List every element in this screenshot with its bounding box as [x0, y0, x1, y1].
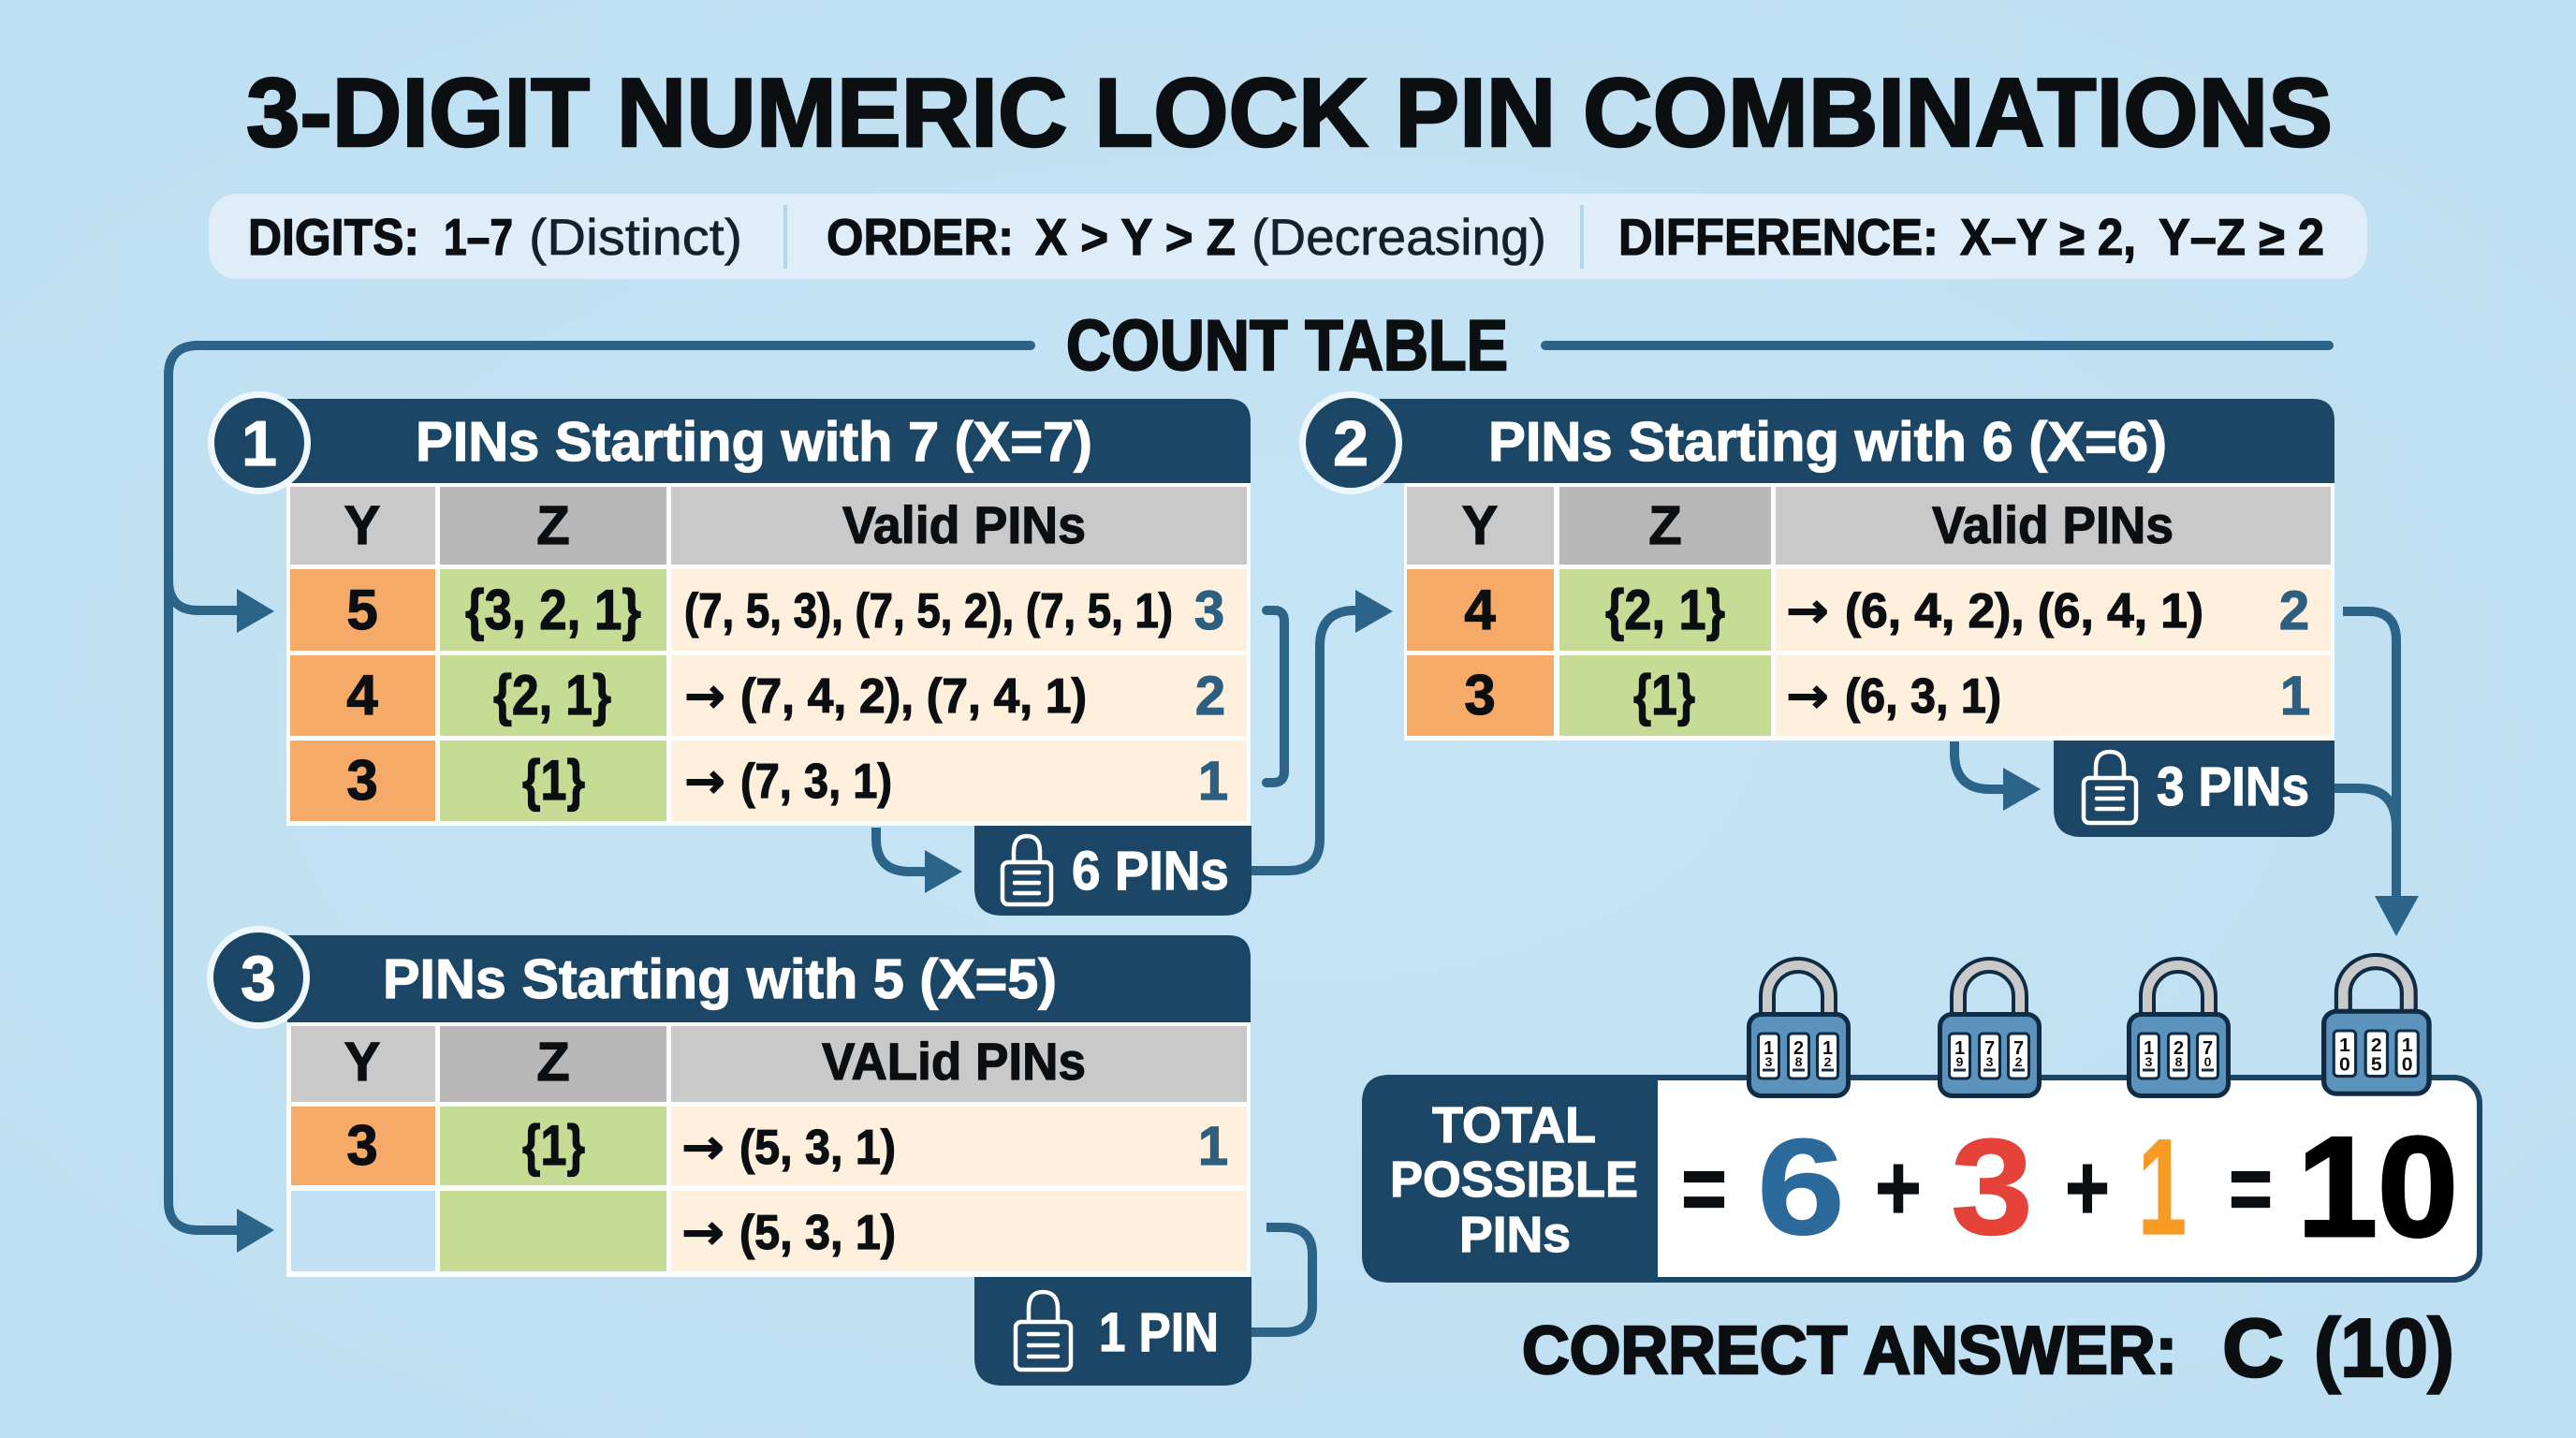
panel 2 number badge: 2 [1333, 408, 1368, 479]
header row: Z [536, 495, 570, 556]
panel 2 title: PINs Starting with 6 (X=6) [1488, 411, 2167, 473]
row Y=4: {2, 1} [493, 664, 611, 726]
icon: combination lock 2: 7 [2013, 1038, 2024, 1059]
row Y=3: {1} [522, 1114, 585, 1177]
icon: combination lock 1: 1 [1822, 1038, 1833, 1059]
icon: combination lock 4: 1 [2339, 1035, 2350, 1056]
total label block [1362, 1075, 1658, 1283]
icon: combination lock 4: 2 [2371, 1035, 2382, 1056]
panel 2 header [1380, 399, 2334, 483]
panel 2 table [1404, 483, 2334, 741]
icon: combination lock 3: 2 [2174, 1038, 2184, 1059]
row Y=4 [1407, 569, 2331, 651]
row Y=3: → [684, 754, 725, 810]
header row: Y [344, 495, 380, 556]
panel 1 number badge: 1 [242, 408, 277, 479]
row Y=4: → [1786, 583, 1829, 639]
correct answer line: CORRECT ANSWER: [1522, 1313, 2177, 1388]
arrow into 3 PINs badge [1954, 741, 2041, 811]
panel 3 total badge: 1 PIN [974, 1277, 1251, 1386]
equation: = [1681, 1137, 1727, 1241]
digits constraint [248, 208, 742, 266]
panel 3: PINs starting with 5 [207, 926, 1251, 1386]
row Y=3: (7, 3, 1) [740, 755, 892, 809]
icon: combination lock 1 [1749, 965, 1848, 1095]
empty repeated row: → [681, 1205, 724, 1261]
icon: combination lock 1: 2 [1824, 1054, 1832, 1069]
row Y=3: 3 [1464, 664, 1496, 726]
total label text: TOTAL [1432, 1097, 1596, 1153]
icon: combination lock 4: 0 [2339, 1054, 2350, 1075]
empty repeated row: (5, 3, 1) [739, 1206, 896, 1260]
panel 3 number badge: 3 [241, 943, 276, 1014]
panel 3 number badge [207, 926, 310, 1029]
panel 1 total badge: 6 PINs: 6 PINs [1072, 841, 1229, 902]
title: 3-DIGIT NUMERIC LOCK PIN COMBINATIONS [246, 59, 2333, 168]
arrow bracket from panel 3 to 1 PIN badge [1251, 1227, 1312, 1332]
row Y=5: {3, 2, 1} [465, 579, 641, 641]
panel 1 table [286, 483, 1251, 826]
total panel frame [1365, 1078, 2480, 1280]
panel 3 total badge: 1 PIN: 1 PIN [1099, 1302, 1219, 1363]
header row [290, 487, 1247, 565]
row Y=3: → [1786, 668, 1829, 725]
panel 3 header [287, 935, 1251, 1022]
icon: combination lock 1: 3 [1765, 1054, 1773, 1069]
row Y=3: 1 [2280, 666, 2310, 726]
icon: combination lock 4: 1 [2402, 1035, 2413, 1056]
digits constraint: DIGITS: [248, 208, 419, 266]
panel 1 number badge [208, 391, 311, 494]
icon: combination lock 4: 0 [2402, 1054, 2413, 1075]
row Y=3 [290, 741, 1247, 821]
icon: combination lock 2: 1 [1954, 1038, 1965, 1059]
panel 1 total badge: 6 PINs [974, 826, 1251, 916]
row Y=3: (6, 3, 1) [1845, 669, 2001, 724]
row Y=3: (5, 3, 1) [739, 1121, 896, 1175]
row Y=4: (6, 4, 2), (6, 4, 1) [1845, 584, 2203, 638]
heading rule right [1545, 341, 2329, 350]
header row: Valid PINs [1932, 495, 2174, 554]
icon: combination lock 3: 7 [2203, 1038, 2213, 1059]
row Y=4: {2, 1} [1605, 579, 1725, 641]
arrow from panel 2 down to total [2334, 611, 2419, 936]
order constraint: ORDER: [827, 208, 1014, 266]
correct answer line [1522, 1301, 2454, 1394]
equation: + [2065, 1136, 2110, 1240]
total label text: POSSIBLE [1390, 1152, 1638, 1208]
icon: combination lock 2 [1939, 965, 2039, 1095]
total panel [1362, 961, 2480, 1283]
row Y=4: 4 [1464, 579, 1496, 641]
header row [291, 1026, 1247, 1102]
row Y=3: {1} [1633, 664, 1695, 726]
panel 3 table [286, 1022, 1251, 1277]
digits constraint: 1–7 [444, 208, 513, 266]
panel 1 header [287, 399, 1251, 483]
panel 1 title: PINs Starting with 7 (X=7) [416, 411, 1092, 473]
row Y=5: 3 [1194, 580, 1224, 641]
equation: = [2229, 1137, 2273, 1241]
header row: Z [536, 1032, 570, 1093]
panel 2: PINs starting with 6 [1299, 391, 2334, 837]
equation [1681, 1108, 2458, 1267]
header row: Valid PINs [842, 495, 1086, 554]
row bracket panel 1 [1266, 610, 1284, 783]
equation: + [1875, 1136, 1922, 1240]
constraints bar [209, 194, 2367, 279]
icon: combination lock 4: 5 [2371, 1054, 2382, 1075]
row Y=5: 5 [346, 579, 378, 641]
row Y=3: 1 [1198, 1116, 1228, 1177]
icon: combination lock 2: 9 [1956, 1054, 1964, 1069]
main bracket arrow to panel 1 and panel 3 rows [168, 345, 1031, 1253]
row Y=4: → [684, 668, 725, 725]
icon: combination lock 4 [2324, 961, 2429, 1093]
icon: combination lock 2: 3 [1986, 1054, 1994, 1069]
panel 3 title: PINs Starting with 5 (X=5) [383, 948, 1057, 1010]
header row: Y [1462, 495, 1498, 556]
arrow into 6 PINs badge [876, 828, 962, 893]
row Y=3: 3 [346, 1114, 378, 1177]
row Y=3: → [681, 1120, 724, 1176]
difference constraint: Y–Z ≥ 2 [2159, 208, 2324, 266]
difference constraint: X–Y ≥ 2, [1960, 208, 2136, 266]
order constraint: X > Y > Z [1035, 208, 1236, 266]
total label text: PINs [1459, 1207, 1571, 1263]
icon: combination lock 3: 8 [2175, 1054, 2183, 1069]
row Y=4: (7, 4, 2), (7, 4, 1) [740, 669, 1087, 724]
equation: 6 [1757, 1110, 1845, 1263]
equation: 1 [2138, 1110, 2187, 1263]
icon: combination lock 3: 1 [2144, 1038, 2154, 1059]
row Y=4: 4 [346, 664, 378, 726]
difference constraint: DIFFERENCE: [1618, 208, 1939, 266]
icon: combination lock 3: 3 [2145, 1054, 2153, 1069]
panel 1: PINs starting with 7 [208, 391, 1251, 916]
row Y=3: 1 [1198, 751, 1228, 812]
arrow from 6 PINs to panel 2 [1251, 590, 1393, 871]
icon: combination lock 3: 0 [2204, 1054, 2212, 1069]
order constraint: (Decreasing) [1251, 208, 1546, 266]
order constraint [827, 208, 1546, 266]
row Y=4: 2 [2279, 580, 2309, 641]
header row: VALid PINs [822, 1032, 1086, 1091]
digits constraint: (Distinct) [529, 208, 742, 266]
row Y=3 [291, 1107, 1247, 1185]
icon: combination lock 2: 2 [2015, 1054, 2023, 1069]
icon: combination lock 2: 7 [1984, 1038, 1995, 1059]
row Y=5 [290, 569, 1247, 651]
icon: combination lock 1: 1 [1764, 1038, 1774, 1059]
equation: 10 [2297, 1108, 2458, 1267]
icon: combination lock 1: 2 [1793, 1038, 1804, 1059]
empty repeated row [291, 1191, 1247, 1271]
correct answer line: C [2222, 1301, 2284, 1394]
panel 2 number badge [1299, 391, 1402, 494]
icon: combination lock 3 [2129, 965, 2228, 1095]
row Y=5: (7, 5, 3), (7, 5, 2), (7, 5, 1) [684, 584, 1173, 638]
icon: combination lock 1: 8 [1795, 1054, 1803, 1069]
row Y=3: 3 [346, 749, 378, 812]
row Y=3: {1} [522, 749, 585, 812]
count table heading: COUNT TABLE [1066, 306, 1508, 386]
header row: Y [344, 1032, 380, 1093]
panel 2 total badge: 3 PINs: 3 PINs [2157, 756, 2309, 817]
correct answer line: (10) [2314, 1301, 2454, 1394]
header row [1407, 487, 2331, 565]
header row: Z [1648, 495, 1682, 556]
row Y=4: 2 [1195, 666, 1225, 726]
difference constraint [1618, 208, 2324, 266]
total label text [1390, 1097, 1638, 1263]
panel 2 total badge: 3 PINs [2054, 741, 2334, 837]
row Y=4 [290, 655, 1247, 736]
equation: 3 [1951, 1110, 2033, 1263]
row Y=3 [1407, 655, 2331, 736]
